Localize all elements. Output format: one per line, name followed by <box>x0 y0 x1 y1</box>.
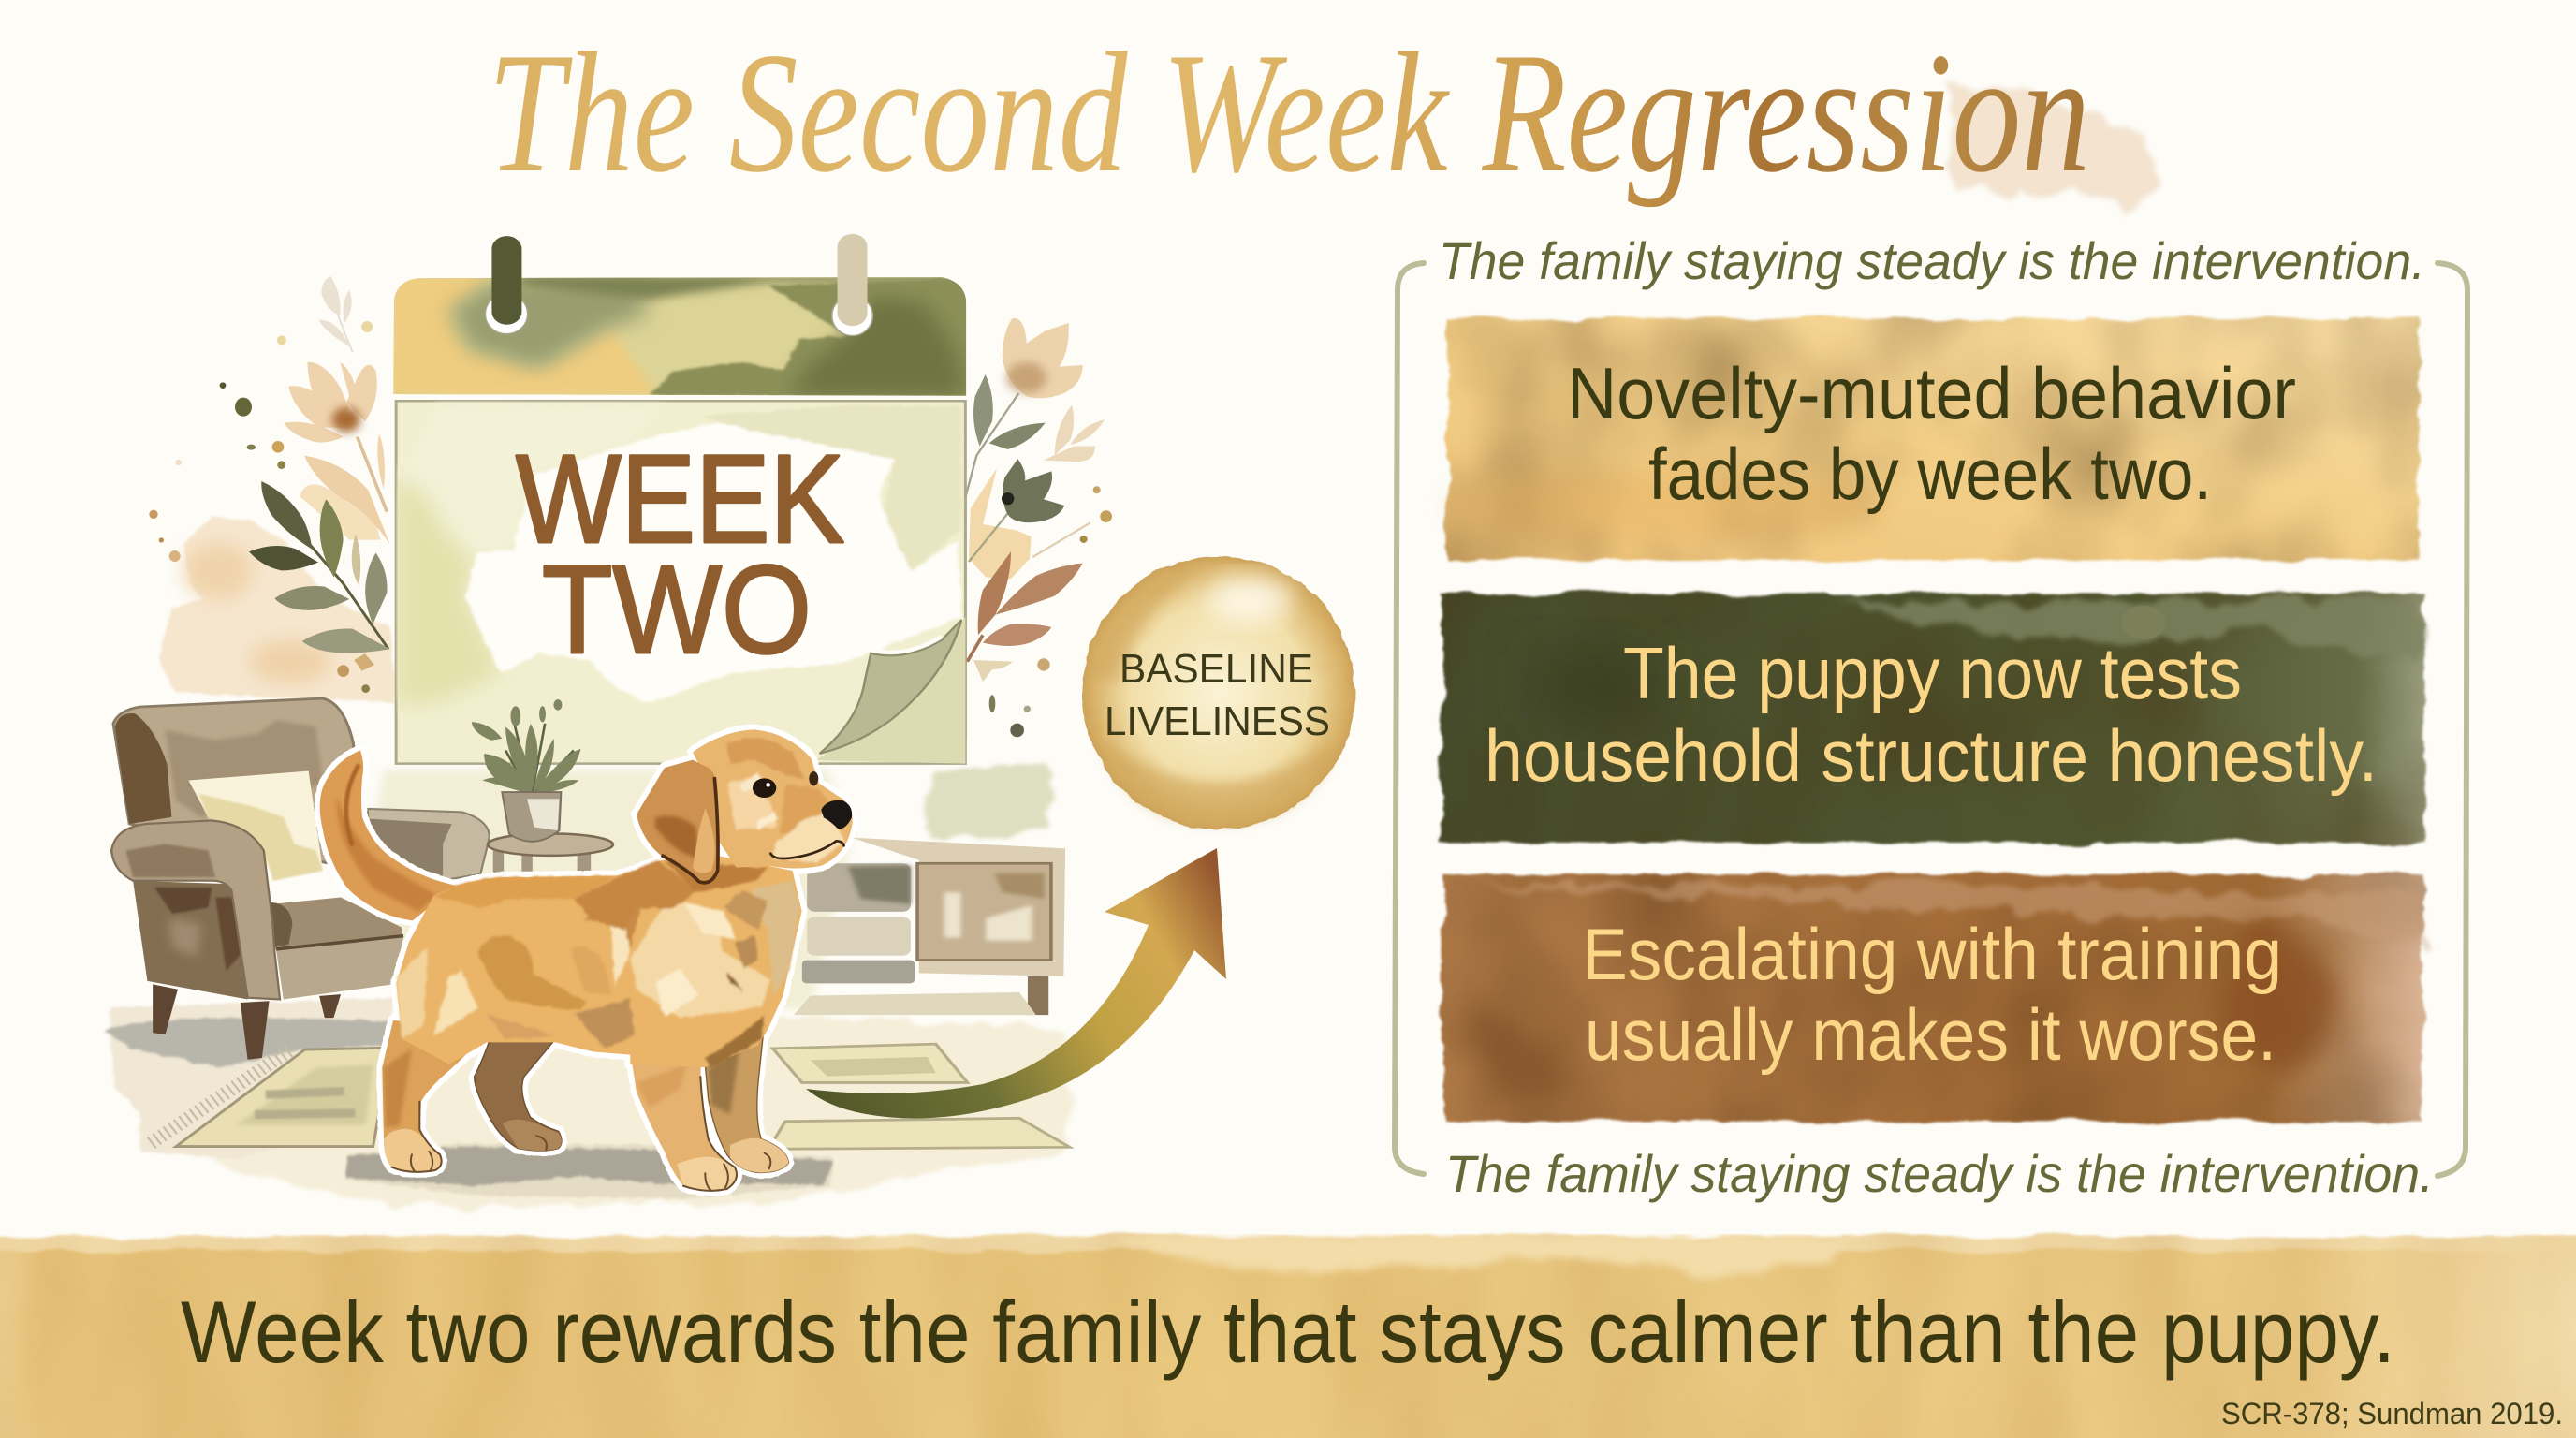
illustration: calendar, room and puppy <box>104 234 1112 1209</box>
calendar <box>390 234 970 764</box>
footer wash <box>0 1236 2576 1438</box>
puppy tail <box>320 750 456 920</box>
puppy <box>320 729 853 1198</box>
sphere <box>1082 556 1355 829</box>
card text line 1: Novelty-muted behavior <box>1567 352 2296 434</box>
panel: escalating card <box>1443 874 2424 1122</box>
steady caption bottom: The family staying steady is the intervention. <box>1445 1144 2434 1203</box>
steady caption top: The family staying steady is the intervention. <box>1439 231 2425 290</box>
puppy ear <box>637 760 719 883</box>
bracket frame <box>1395 263 2467 1176</box>
footer takeaway: Week two rewards the family that stays calmer than the puppy. <box>181 1283 2395 1381</box>
puppy nose and mouth <box>770 800 852 858</box>
card wash <box>1443 874 2424 1122</box>
card text line 1: Escalating with training <box>1582 913 2282 995</box>
chair cushion <box>188 771 323 881</box>
citation: SCR-378; Sundman 2019. <box>2221 1397 2563 1431</box>
sideboard <box>794 838 1065 1015</box>
card text line 2: fades by week two. <box>1648 433 2212 515</box>
chair near arm <box>111 820 280 999</box>
calendar page curl <box>815 617 965 764</box>
baseline liveliness sphere <box>1082 556 1355 829</box>
puppy fur markings <box>396 861 798 1067</box>
panel: household structure card <box>1442 594 2424 843</box>
background washes <box>134 763 1070 1209</box>
puppy eyes <box>753 771 818 798</box>
chair floor shadow and rug <box>104 998 394 1158</box>
title text: The Second Week Regression <box>488 17 2090 208</box>
card wash <box>1447 318 2419 560</box>
sphere label line 1: BASELINE <box>1120 646 1313 692</box>
chair front <box>133 881 248 999</box>
calendar binding rings <box>485 234 872 336</box>
card text line 2: household structure honestly. <box>1485 714 2378 797</box>
footer band <box>0 1236 2576 1438</box>
rising arrow <box>806 848 1226 1118</box>
chair legs <box>153 984 341 1060</box>
floor shadow <box>346 1144 833 1198</box>
card text line 2: usually makes it worse. <box>1585 993 2276 1076</box>
puppy far legs <box>475 1014 789 1173</box>
chair back <box>113 698 366 871</box>
side table with potted plant <box>472 699 613 874</box>
calendar page <box>396 401 965 764</box>
puppy near rear leg <box>382 1020 487 1172</box>
card wash <box>1442 594 2424 843</box>
calendar label TWO: TWO <box>542 540 812 680</box>
armchair <box>104 698 490 1158</box>
title <box>488 17 2159 211</box>
left foliage <box>149 276 396 702</box>
title watercolor blot <box>1952 84 2159 211</box>
puppy near front leg <box>630 1042 737 1191</box>
puppy paws toes <box>391 1077 770 1191</box>
puppy body <box>396 852 802 1067</box>
rugs and floor <box>768 1044 1070 1149</box>
card text line 1: The puppy now tests <box>1623 632 2242 714</box>
calendar header band <box>390 275 970 399</box>
calendar label WEEK: WEEK <box>516 430 844 569</box>
chair far arm <box>368 809 490 881</box>
sphere label line 2: LIVELINESS <box>1105 698 1330 744</box>
chair seat <box>270 898 402 951</box>
panel: novelty card <box>1447 318 2419 560</box>
right foliage <box>966 318 1112 740</box>
puppy halo <box>320 729 853 1191</box>
puppy head <box>637 729 853 883</box>
